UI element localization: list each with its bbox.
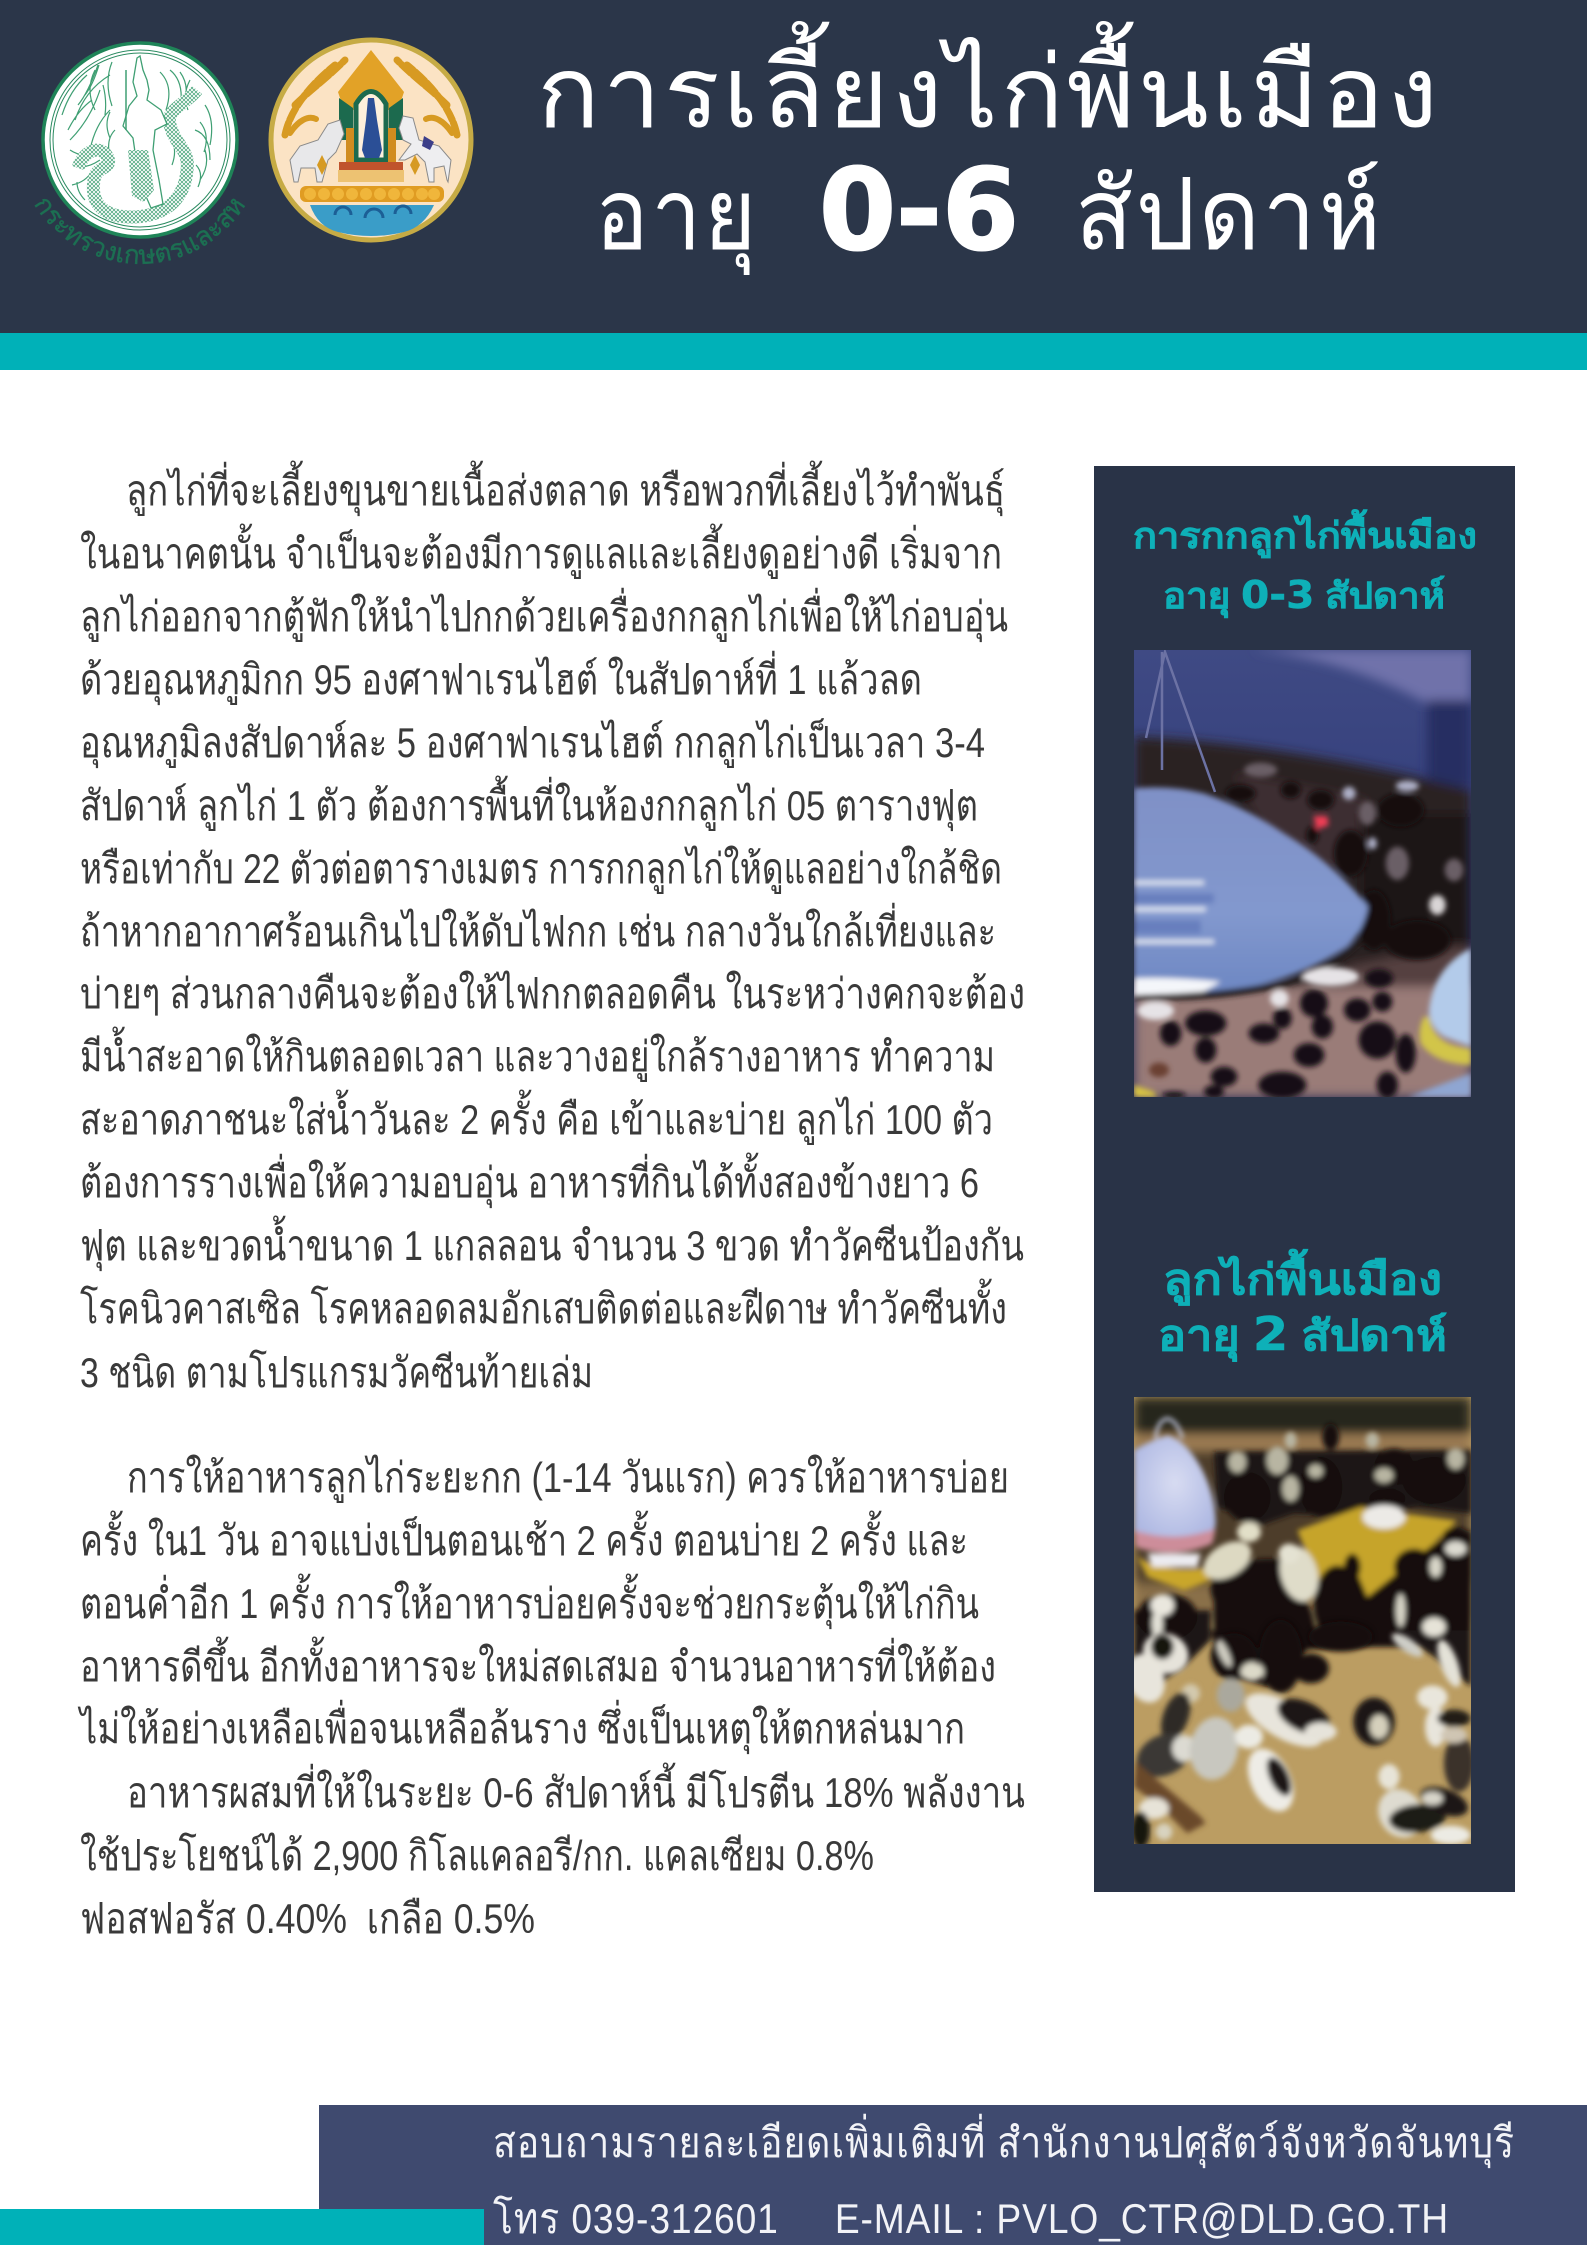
body paragraph 1: ลูกไก่ที่จะเลี้ยงขุนขายเนื้อส่งตลาด หรือพวกที่เลี้ยงไว้ทำพันธุ์: [126, 460, 1005, 517]
teal header stripe: [0, 333, 1587, 370]
panel: side photo column: [1094, 466, 1515, 1892]
body paragraph 1: 3 ชนิด ตามโปรแกรมวัคซีนท้ายเล่ม: [80, 1348, 593, 1396]
body paragraph 1: ลูกไก่ออกจากตู้ฟักให้นำไปกกด้วยเครื่องกกลูกไก่เพื่อให้ไก่อบอุ่น: [80, 588, 1008, 643]
body paragraph 1: สัปดาห์ ลูกไก่ 1 ตัว ต้องการพื้นที่ในห้องกกลูกไก่ 05 ตารางฟุต: [80, 775, 978, 832]
body paragraph 1: หรือเท่ากับ 22 ตัวต่อตารางเมตร การกกลูกไก่ให้ดูแลอย่างใกล้ชิด: [80, 845, 1002, 894]
body paragraph 2: ตอนค่ำอีก 1 ครั้ง การให้อาหารบ่อยครั้งจะช่วยกระตุ้นให้ไก่กิน: [80, 1573, 979, 1630]
body paragraph 1: อุณหภูมิลงสัปดาห์ละ 5 องศาฟาเรนไฮต์ กกลูกไก่เป็นเวลา 3-4: [80, 718, 985, 769]
footer contact text: โทร 039-312601 E-MAIL : PVLO_CTR@DLD.GO.TH: [493, 2194, 1449, 2242]
side heading 1: อายุ 0-3 สัปดาห์: [1163, 573, 1445, 619]
side heading 1: การกกลูกไก่พื้นเมือง: [1133, 509, 1477, 559]
body paragraph 1: มีน้ำสะอาดให้กินตลอดเวลา และวางอยู่ใกล้รางอาหาร ทำความ: [80, 1026, 995, 1082]
body paragraph 1: ฟุต และขวดน้ำขนาด 1 แกลลอน จำนวน 3 ขวด ทำวัคซีนป้องกัน: [80, 1215, 1024, 1272]
body paragraph 1: [80, 460, 1025, 1396]
title: [537, 21, 1441, 276]
body paragraph 1: ถ้าหากอากาศร้อนเกินไปให้ดับไฟกก เช่น กลางวันใกล้เที่ยงและ: [80, 903, 996, 955]
body paragraph 3: อาหารผสมที่ให้ในระยะ 0-6 สัปดาห์นี้ มีโปรตีน 18% พลังงาน: [127, 1762, 1025, 1816]
title line 2: อายุ: [595, 159, 759, 276]
footer teal accent: [0, 2209, 484, 2245]
photo: two-week-old chicks: [1120, 1397, 1474, 1848]
title line 2: [595, 146, 1384, 276]
body paragraph 2: [78, 1454, 1009, 1755]
title line 2: สัปดาห์: [1075, 159, 1384, 271]
side heading 2: อายุ 2 สัปดาห์: [1158, 1307, 1447, 1362]
body paragraph 1: ต้องการรางเพื่อให้ความอบอุ่น อาหารที่กินได้ทั้งสองข้างยาว 6: [80, 1152, 979, 1209]
body paragraph 1: บ่ายๆ ส่วนกลางคืนจะต้องให้ไฟกกตลอดคืน ในระหว่างคกจะต้อง: [80, 970, 1025, 1017]
body paragraph 2: การให้อาหารลูกไก่ระยะกก (1-14 วันแรก) ควรให้อาหารบ่อย: [127, 1454, 1009, 1503]
side heading 1: [1133, 509, 1477, 619]
footer band: [319, 2105, 1587, 2245]
photo: brooder with chicks: [1134, 650, 1471, 1098]
body paragraph 2: อาหารดีขึ้น อีกทั้งอาหารจะใหม่สดเสมอ จำนวนอาหารที่ให้ต้อง: [80, 1636, 996, 1690]
body paragraph 2: ไม่ให้อย่างเหลือเพื่อจนเหลือล้นราง ซึ่งเป็นเหตุให้ตกหล่นมาก: [78, 1700, 965, 1755]
logo: Department of Livestock seal: [271, 40, 471, 240]
footer contact text: [493, 2114, 1515, 2242]
body paragraph 3: ฟอสฟอรัส 0.40% เกลือ 0.5%: [80, 1895, 535, 1942]
body paragraph 2: ครั้ง ใน1 วัน อาจแบ่งเป็นตอนเช้า 2 ครั้ง ตอนบ่าย 2 ครั้ง และ: [80, 1510, 968, 1564]
body paragraph 1: ด้วยอุณหภูมิกก 95 องศาฟาเรนไฮต์ ในสัปดาห์ที่ 1 แล้วลด: [80, 651, 922, 706]
body paragraph 3: [80, 1762, 1025, 1942]
body paragraph 1: ในอนาคตนั้น จำเป็นจะต้องมีการดูแลและเลี้ยงดูอย่างดี เริ่มจาก: [80, 523, 1002, 579]
body paragraph 1: สะอาดภาชนะใส่น้ำวันละ 2 ครั้ง คือ เข้าและบ่าย ลูกไก่ 100 ตัว: [80, 1089, 993, 1145]
title line 1: การเลี้ยงไก่พื้นเมือง: [537, 21, 1441, 149]
body paragraph 3: ใช้ประโยชน์ได้ 2,900 กิโลแคลอรี/กก. แคลเซียม 0.8%: [80, 1831, 874, 1879]
header band: [0, 0, 1587, 333]
title line 2: 0-6: [819, 146, 1019, 276]
logo: Ministry of Agriculture seal: [43, 43, 237, 237]
body paragraph 1: โรคนิวคาสเซิล โรคหลอดลมอักเสบติดต่อและฝีดาษ ทำวัคซีนทั้ง: [80, 1278, 1007, 1332]
side heading 2: ลูกไก่พื้นเมือง: [1163, 1248, 1442, 1306]
side heading 2: [1158, 1248, 1447, 1362]
